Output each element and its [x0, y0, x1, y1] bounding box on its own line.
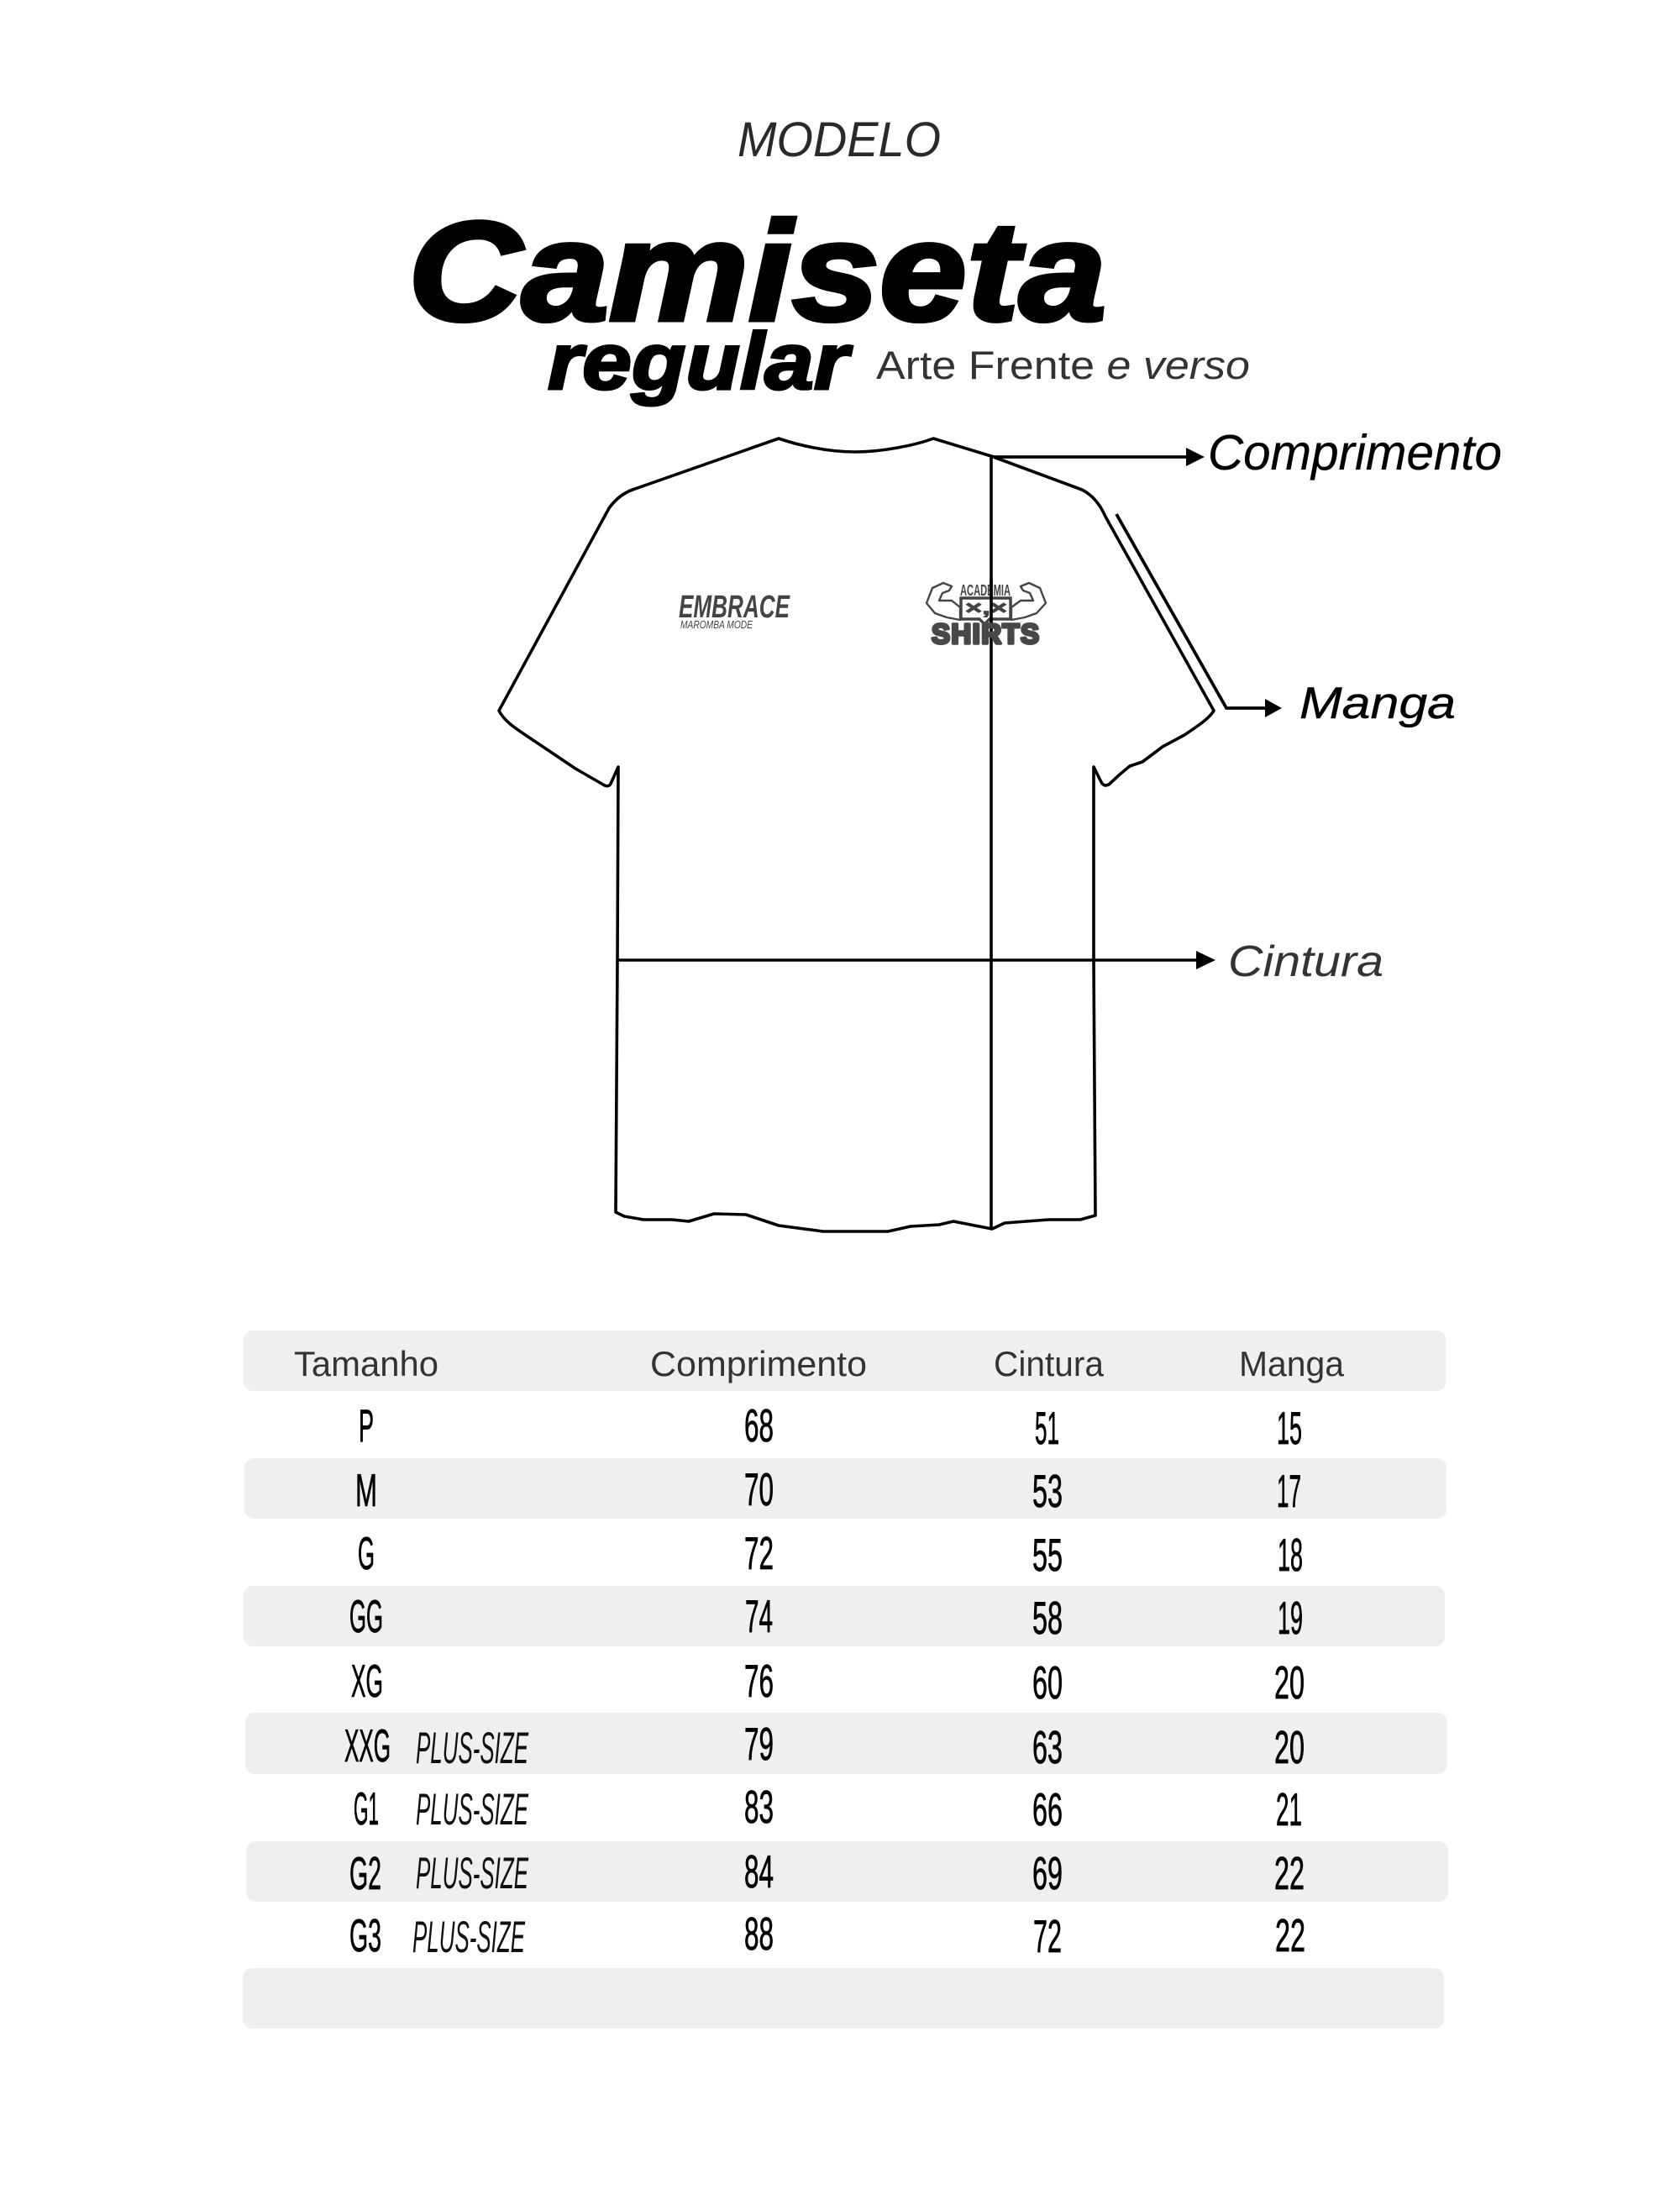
row: XG: 20: [1274, 1656, 1305, 1709]
row: G1 plus-size: 83: [744, 1781, 774, 1833]
row: G: 72: [744, 1527, 774, 1579]
table row backgrounds: [243, 1331, 1448, 2029]
row: XXG plus-size: XXG: [344, 1719, 391, 1772]
arrow: Comprimento: [991, 448, 1205, 1229]
text: Arte Frente e verso: Arte Frente e verso: [876, 343, 1250, 387]
row: G3 plus-size: PLUS-SIZE: [412, 1913, 525, 1962]
logo: Academia Shirts: [927, 580, 1046, 649]
logo: Embrace Maromba Mode: MAROMBA MODE: [680, 618, 753, 631]
row: G2 plus-size: 69: [1032, 1847, 1063, 1899]
row: XG: [351, 1655, 1305, 1709]
row: G1 plus-size: G1: [354, 1782, 379, 1835]
row: GG: 74: [745, 1590, 773, 1642]
row: G3 plus-size: 22: [1275, 1909, 1305, 1961]
subtitle: regular: regular: [548, 317, 853, 407]
logo: Embrace Maromba Mode: [679, 590, 790, 631]
row: G1 plus-size: 66: [1032, 1783, 1063, 1835]
table: size chart: 19: [1278, 1592, 1303, 1644]
row: G3 plus-size: [349, 1908, 1305, 1962]
label: Comprimento: Comprimento: [1208, 425, 1502, 480]
row: G2 plus-size: 84: [744, 1845, 774, 1898]
table header: [294, 1344, 1345, 1383]
row: GG: GG: [349, 1590, 383, 1642]
row: GG: [349, 1590, 1303, 1644]
row: G2 plus-size: G2: [349, 1847, 381, 1899]
row: P: 68: [744, 1399, 774, 1451]
label: Cintura: Cintura: [1228, 937, 1383, 986]
row: XG: 60: [1032, 1656, 1063, 1709]
table: size chart: 18: [1278, 1529, 1303, 1581]
table: size chart: 15: [1277, 1402, 1302, 1454]
table header: Cintura: [994, 1344, 1105, 1383]
logo: Embrace Maromba Mode: EMBRACE: [679, 590, 790, 625]
row: G: [358, 1527, 1303, 1581]
row: XXG plus-size: PLUS-SIZE: [416, 1724, 528, 1773]
table: size chart: 17: [1277, 1465, 1301, 1517]
row: XXG plus-size: 20: [1274, 1721, 1305, 1773]
row: G1 plus-size: 21: [1276, 1783, 1302, 1835]
table header: Tamanho: [294, 1344, 438, 1383]
row: G: G: [358, 1527, 375, 1579]
row: G2 plus-size: 22: [1274, 1847, 1305, 1899]
title: Camiseta: Camiseta: [408, 192, 1106, 350]
row: P: [359, 1399, 1302, 1454]
logo: Academia Shirts: SHIRTS: [932, 618, 1039, 649]
row: XG: XG: [351, 1655, 383, 1707]
row: G3 plus-size: G3: [349, 1909, 381, 1961]
row: G: 55: [1032, 1529, 1063, 1581]
logo: Academia Shirts: ×,×: [965, 597, 1007, 618]
row: G3 plus-size: 88: [744, 1908, 774, 1960]
logo: Academia Shirts: ACADEMIA: [960, 582, 1011, 599]
row: P: 51: [1035, 1402, 1059, 1454]
row: G2 plus-size: [349, 1845, 1305, 1899]
row: XG: 76: [744, 1655, 774, 1707]
t-shirt outline: [499, 438, 1214, 1231]
row: G1 plus-size: [354, 1781, 1302, 1835]
row: XXG plus-size: 79: [744, 1718, 774, 1770]
row: M: 53: [1032, 1465, 1063, 1517]
row: XXG plus-size: [344, 1718, 1305, 1773]
arrow: Cintura: [617, 951, 1215, 969]
row: G2 plus-size: PLUS-SIZE: [416, 1849, 528, 1898]
row: XXG plus-size: 63: [1032, 1721, 1063, 1773]
label: Manga: Manga: [1299, 679, 1456, 728]
row: M: 70: [744, 1463, 774, 1515]
table: size chart: [243, 1331, 1448, 2029]
table header: Comprimento: [650, 1344, 867, 1383]
heading: MODELO: MODELO: [738, 113, 941, 167]
row: GG: 58: [1032, 1592, 1063, 1644]
row: G1 plus-size: PLUS-SIZE: [416, 1785, 528, 1835]
row: G3 plus-size: 72: [1033, 1910, 1062, 1962]
arrow: Manga: [1116, 514, 1282, 717]
row: M: [355, 1463, 1301, 1517]
table header: Manga: [1239, 1344, 1345, 1383]
row: P: P: [359, 1399, 374, 1451]
row: M: M: [355, 1464, 377, 1516]
